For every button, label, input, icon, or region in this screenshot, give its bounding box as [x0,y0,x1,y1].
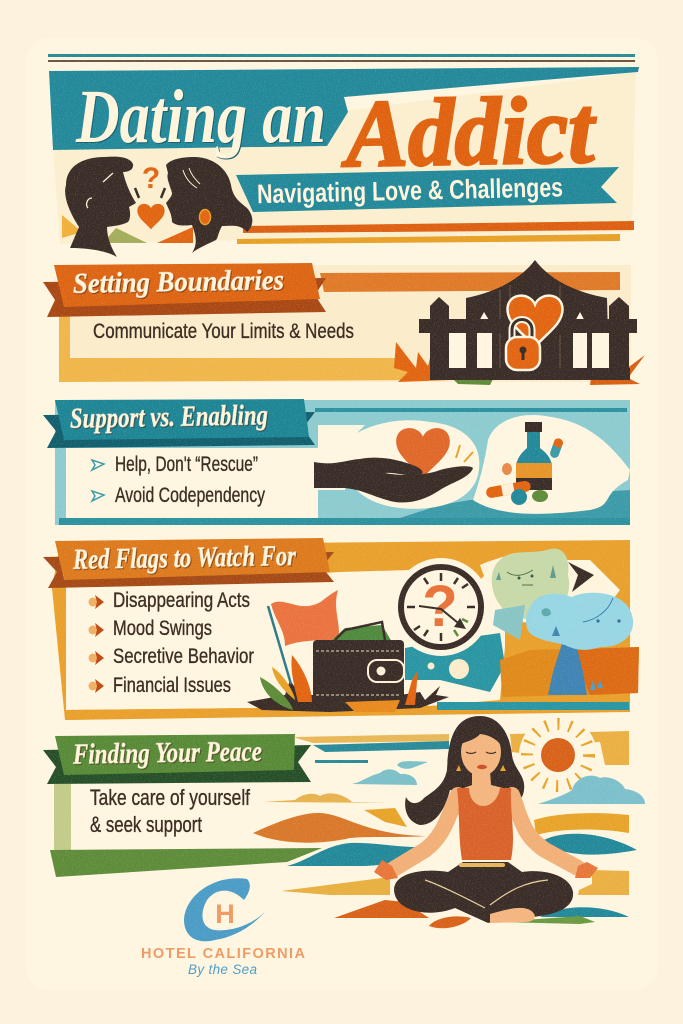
icon: chevron [568,562,594,592]
tension marks [135,188,165,198]
fringe [458,724,503,748]
panel: red flags [43,538,639,720]
foot left [429,916,471,928]
waistband [459,863,505,867]
speech bubble right [473,415,630,514]
icon: hand [314,458,473,502]
logo tagline: By the Sea [188,962,257,977]
arms [392,795,578,870]
text block: peace: & seek support [90,812,202,837]
landscape bands [253,731,637,924]
ribbon: finding your peace [43,734,311,784]
green strip [50,848,322,877]
bullet list: red flags: Disappearing Acts [113,589,250,612]
lens: cream right [480,553,608,620]
logo: hotel california [141,878,306,977]
icon: clock: ? [422,574,458,639]
header triangles [62,215,193,243]
icon: cloud right [538,776,645,804]
bottom teal strip [437,702,629,710]
icon: teal wedge [493,605,525,640]
orange block [500,647,639,697]
title: Dating an: Dating an [75,75,326,159]
header stripes [237,221,634,244]
bullet list: support [92,453,265,507]
bullet list: red flags: Mood Swings [113,617,212,640]
ribbon: red flags [43,538,334,588]
hair [405,716,524,825]
text: communicate: Communicate Your Limits & Needs [93,320,354,343]
icon: pills [485,437,564,505]
icon: sparks [456,445,473,462]
hands [374,860,598,880]
ribbon: support vs enabling [43,399,315,448]
icon: wallet [313,640,404,700]
neck and chest [458,770,511,815]
icon: fence with lock [419,260,637,380]
icon: money [330,622,392,642]
facial features [466,752,496,754]
icon: blue tree [548,640,587,695]
strip: left bottom [65,708,260,720]
icon: green storm cloud [492,549,569,619]
logo letter: H [215,899,235,929]
circles in teal [428,659,469,679]
bullet list: red flags: Secretive Behavior [113,645,254,668]
earrings [456,765,506,771]
legs [394,862,573,923]
icon: meditating woman [374,716,598,928]
text block: peace: Take care of yourself [90,785,251,810]
ribbon: setting boundaries [43,263,326,317]
header teal banner [49,67,639,150]
header panel [49,67,639,257]
bullet list: support: Avoid Codependency [115,484,265,507]
tank top [457,788,513,860]
leg highlights [425,880,548,908]
ribbon: red flags: Red Flags to Watch For [72,540,297,576]
icon: flag [268,590,339,684]
logo swoosh [184,878,268,941]
icon: grass right [590,350,645,385]
icon: man ear highlight [87,173,113,208]
bullet list: support: Help, Don't “Rescue” [115,453,258,476]
icon: question mark: ? [142,162,160,195]
icon: green patch [451,377,494,385]
teal blob [405,633,505,692]
icon: sun [519,716,597,794]
icon: clock [395,561,487,653]
logo name: HOTEL CALIFORNIA [141,946,306,962]
icon: grass under wallet [247,680,449,712]
icon: woman hair highlight [183,168,200,188]
icon: heart [137,204,165,229]
icon: woman silhouette [166,157,252,253]
icon: leaves [260,655,418,712]
title: Addict: Addict [340,76,598,187]
header rules [48,54,635,62]
icon: bottle [516,422,552,490]
icon: blue cloud [526,593,633,690]
panel: setting boundaries [43,260,645,385]
text block: peace [90,785,251,837]
speech bubble left [338,420,479,509]
panel: finding your peace [43,716,645,928]
subtitle banner: Navigating Love & Challenges [257,172,563,209]
panel: support vs enabling [43,399,630,525]
ribbon: finding your peace: Finding Your Peace [72,735,262,771]
face [461,728,501,776]
ribbon: support vs enabling: Support vs. Enabling [70,399,268,435]
icon: man silhouette [65,157,136,257]
foot right [490,908,535,923]
icon: heart in hand [396,428,450,478]
bullet list: red flags [88,589,254,697]
bullet list: red flags: Financial Issues [113,674,231,697]
ribbon: setting boundaries: Setting Boundaries [73,264,284,300]
icon: grass left [394,342,449,382]
icon: earring [200,210,210,224]
